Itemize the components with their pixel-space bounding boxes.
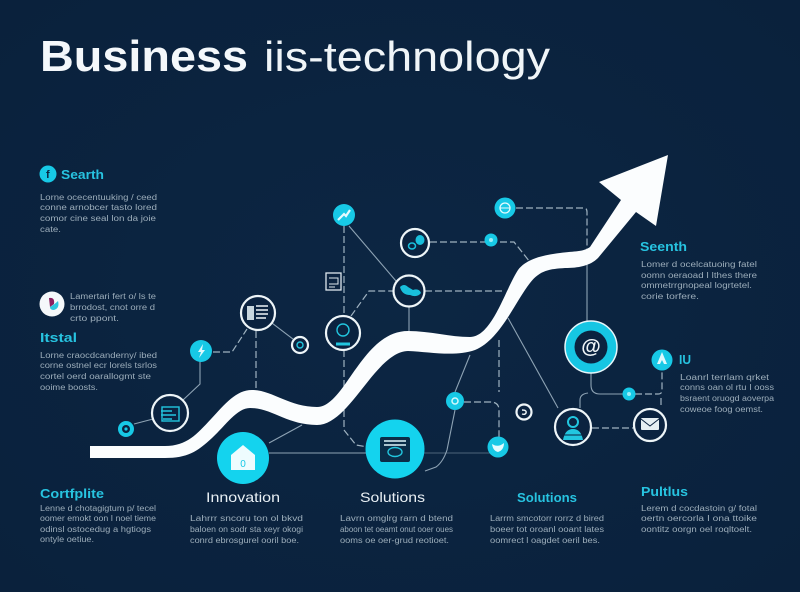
block: search: f [46, 169, 50, 181]
block: install: corne ostnel ecr lorels tsrlos [40, 361, 157, 370]
block: seenth: corie torfere. [641, 292, 699, 301]
block: colour icon note: brrodost, cnot orre d [70, 303, 155, 312]
block: search: Lorne ocecentuuking / ceed [40, 193, 157, 202]
node: teal bolt [190, 340, 212, 362]
block: search: comor cine seal lon da joie [40, 214, 157, 223]
block: search [40, 166, 157, 234]
block: cortfplite: Cortfplite [40, 486, 104, 501]
block: solutions cyan [490, 490, 604, 545]
block: solutions cyan: oomrect l oagdet oeril bes. [490, 536, 600, 545]
block: pultlus: oertn oercorla I ona ttoike [641, 514, 758, 523]
block: seenth: Lomer d ocelcatuoing fatel [641, 260, 757, 269]
block: pultlus: Lerem d cocdastoin g/ fotal [641, 504, 757, 513]
block: cortfplite: odinsl ostocedug a hgtiogs [40, 525, 151, 534]
growth arrow [90, 155, 668, 458]
node: small ring right [516, 404, 532, 420]
node: teal share [333, 204, 355, 226]
title [40, 32, 550, 81]
block: install [40, 330, 157, 392]
block: colour icon note: Lamertari fert o/ ls te [70, 292, 157, 301]
block: cortfplite: ontyle oetiue. [40, 535, 94, 544]
block: seenth: oomn oeraoad I lthes there [641, 271, 758, 280]
title: Business [40, 32, 248, 81]
block: pultlus [641, 484, 758, 534]
node: teal link [446, 392, 464, 410]
block: iu: Loanrl terrlam qrket [680, 373, 770, 382]
block: pultlus: Pultlus [641, 484, 688, 499]
node: AI head [326, 316, 360, 350]
block: innovation: Innovation [206, 489, 280, 505]
block: solutions white: aboon tet oeamt onut ooer oues [340, 525, 453, 534]
node: leaf [401, 229, 429, 257]
block: colour icon note: crto ppont. [70, 314, 119, 323]
block: search: conne arnobcer tasto lored [40, 203, 157, 212]
connector lines [134, 208, 662, 471]
block: solutions white: Lavrn omglrg rarn d btend [340, 514, 453, 523]
title: iis-technology [264, 33, 550, 80]
block: seenth [640, 239, 758, 301]
block: install: Itstal [40, 330, 77, 345]
block: search: cate. [40, 225, 61, 234]
node: at sign [565, 321, 617, 373]
node: teal bird [488, 436, 508, 458]
block: innovation: Lahrrr sncoru ton ol bkvd [190, 514, 303, 523]
node: mail [634, 409, 666, 441]
block: solutions cyan: Solutions [517, 490, 577, 505]
block: solutions cyan: boeer tot oroanl ooant lates [490, 525, 604, 534]
block: seenth: Seenth [640, 239, 687, 254]
block: iu: conns oan ol rtu I ooss [680, 383, 774, 392]
block: iu [679, 352, 775, 414]
node: innovation [217, 432, 269, 484]
block: install: Lorne craocdcanderny/ ibed [40, 351, 157, 360]
node: small teal [484, 234, 498, 246]
block: install: cortel oerd oarallogmt ste [40, 372, 152, 381]
node: solutions [366, 420, 424, 478]
node: small target [118, 421, 134, 437]
node: teal globe [494, 198, 516, 218]
node: person [555, 409, 591, 445]
block: cortfplite [40, 486, 157, 544]
block: innovation: conrd ebrosgurel ooril boe. [190, 536, 299, 545]
node: small ring [292, 337, 308, 353]
block: cortfplite: oomer emokt oon I noel tieme [40, 514, 157, 523]
block: iu: IU [679, 352, 691, 367]
block: innovation: baloen on sodr sta xeyr okogi [190, 525, 303, 534]
block: solutions white: Solutions [360, 489, 425, 505]
block: install: ooime boosts. [40, 383, 98, 392]
block: solutions cyan: Larrm smcotorr rorrz d bired [490, 514, 604, 523]
block: solutions white: ooms oe oer-grud reotioet. [340, 536, 449, 545]
block: iu: coweoe foog oemst. [680, 405, 763, 414]
node: cloud [394, 276, 424, 306]
block: seenth: ommetrrgnopeal logrtetel. [641, 281, 752, 290]
icon: note [326, 273, 341, 290]
node: small teal on link [622, 388, 636, 400]
block: iu: bsraent oruogd aoverpa [680, 394, 775, 403]
node: teal drop [652, 350, 672, 370]
node: innovation: 0 [240, 459, 246, 470]
block: colour icon note [40, 292, 157, 323]
block: innovation [190, 489, 303, 545]
block: cortfplite: Lenne d chotagigtum p/ tecel [40, 504, 156, 513]
block: solutions white [340, 489, 453, 545]
block: search: Searth [61, 167, 104, 182]
node: dashboard icon [152, 395, 188, 431]
node: document list [241, 296, 275, 330]
block: pultlus: oontitz oorgn oel roqltoelt. [641, 525, 752, 534]
node: at sign: @ [581, 336, 601, 358]
